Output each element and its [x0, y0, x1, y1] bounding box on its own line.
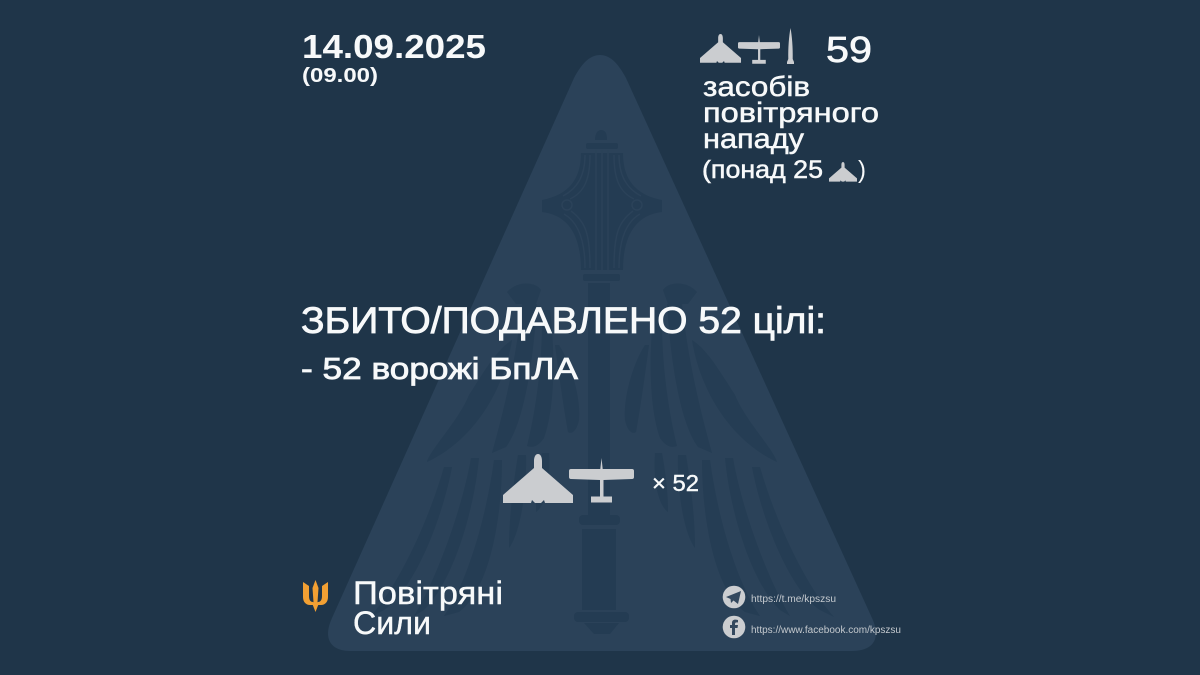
emblem sword light lines	[562, 150, 642, 270]
icon: large plane	[569, 458, 634, 502]
emblem left wing	[370, 284, 579, 617]
closing bracket: )	[858, 156, 866, 184]
facebook link: https://www.facebook.com/kpszsu	[751, 625, 901, 636]
result detail: - 52 ворожі БпЛА	[301, 351, 578, 386]
time: (09.00)	[302, 65, 378, 87]
icon: facebook	[723, 616, 745, 638]
text line 4: (понад 25	[702, 156, 823, 184]
total count: 59	[826, 29, 872, 70]
text line 2: повітряного	[703, 97, 879, 128]
date heading: 14.09.2025	[302, 28, 486, 65]
icon: top plane	[738, 35, 780, 64]
emblem sword and column	[542, 130, 662, 634]
telegram link: https://t.me/kpszsu	[751, 594, 836, 605]
air attack means description	[702, 71, 879, 184]
text line 3: нападу	[703, 123, 804, 154]
emblem right wing	[625, 284, 834, 617]
text line 1: засобів	[703, 71, 810, 102]
name line 1: Повітряні	[353, 575, 503, 611]
icon: telegram	[723, 586, 745, 608]
main result heading: ЗБИТО/ПОДАВЛЕНО 52 цілі:	[301, 300, 826, 341]
emblem triangle	[328, 55, 876, 651]
organisation name	[353, 575, 503, 641]
icon: large drone	[503, 454, 573, 503]
icon: inline drone	[829, 162, 857, 182]
icon: top missile	[787, 28, 794, 64]
icon: top drone	[700, 34, 741, 63]
icon: Air Force trident	[303, 580, 328, 612]
background emblem: triangle with trident-sword and wings	[328, 55, 876, 651]
multiplier count: × 52	[652, 470, 699, 496]
name line 2: Сили	[353, 605, 431, 641]
